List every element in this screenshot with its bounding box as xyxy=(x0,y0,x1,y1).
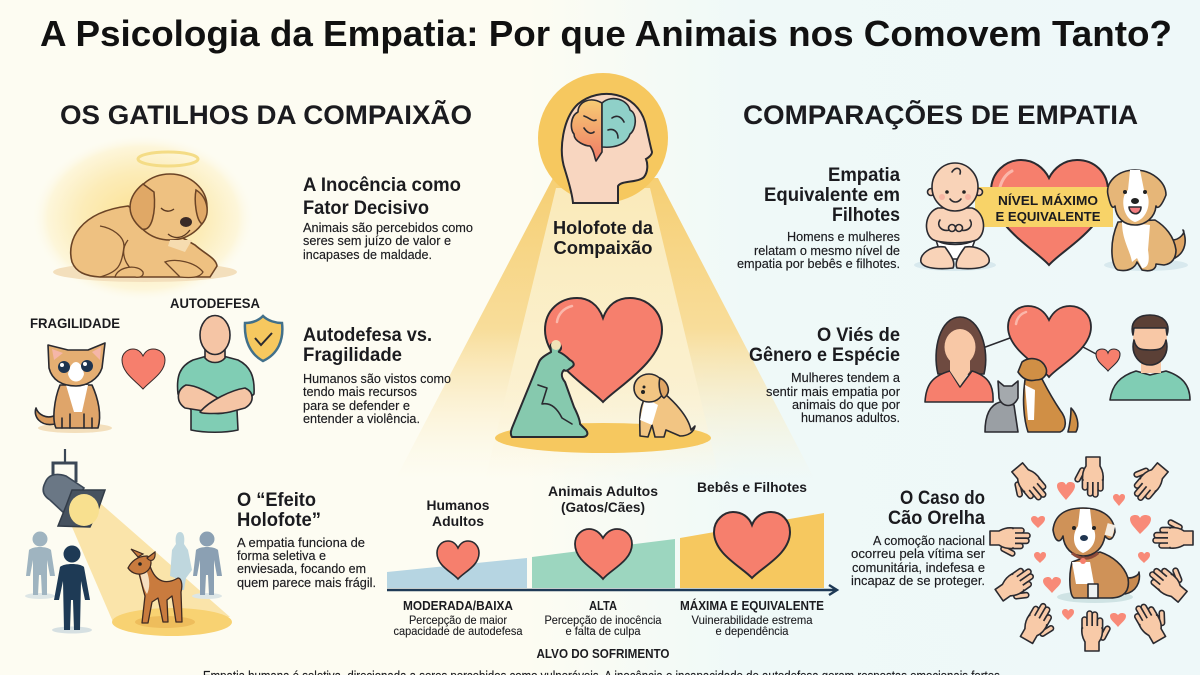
caption: máxima: Vuinerabilidade estrema xyxy=(692,613,813,627)
text: heading xyxy=(749,325,900,366)
text: heading: Filhotes xyxy=(832,205,900,226)
icon: woman xyxy=(925,317,993,402)
panel: Caso do Cão Orelha xyxy=(851,455,1195,651)
caption: máxima: MÁXIMA E EQUIVALENTE xyxy=(680,598,824,613)
icon: spotlight beam and pool xyxy=(72,503,232,636)
caption: máxima: e dependência xyxy=(716,624,789,638)
label: Holofote da Compaixão: Holofote da xyxy=(553,218,654,238)
axis label: ALVO DO SOFRIMENTO xyxy=(536,646,670,661)
heading: left column: OS GATILHOS DA COMPAIXÃO xyxy=(60,99,472,130)
bar: animais adultos xyxy=(532,539,675,588)
text: description xyxy=(303,220,473,262)
caption: moderada: Percepção de maior xyxy=(409,613,507,627)
caption: alta: ALTA xyxy=(589,598,618,613)
text: description: A comoção nacional xyxy=(873,533,985,548)
label: Humanos Adultos xyxy=(426,497,490,529)
text: description: animais do que por xyxy=(792,397,901,412)
text: heading: Equivalente em xyxy=(764,185,900,206)
icon: shield with check xyxy=(245,316,282,361)
text: description: Animais são percebidos como xyxy=(303,220,473,235)
banner: nível máximo xyxy=(975,187,1113,227)
icon: sleeping puppy with halo xyxy=(31,134,255,302)
text: description: seres sem juízo de valor e xyxy=(303,233,451,248)
text: description: incapaz de se proteger. xyxy=(851,573,985,588)
text: description xyxy=(303,371,451,426)
label: Holofote da Compaixão xyxy=(553,218,654,258)
chart: alvo do sofrimento xyxy=(387,479,837,661)
icon: heart xyxy=(1008,306,1091,377)
text: heading: Gênero e Espécie xyxy=(749,345,900,366)
caption: alta xyxy=(544,598,662,638)
text: description: para se defender e xyxy=(303,398,410,413)
icon: man with crossed arms xyxy=(178,316,254,432)
label: Animais Adultos xyxy=(548,483,658,515)
label: Humanos Adultos: Humanos xyxy=(426,497,490,513)
icon: grey cat xyxy=(985,381,1018,432)
text: heading: Empatia xyxy=(828,165,900,186)
text: description: quem parece mais frágil. xyxy=(237,575,376,590)
text: description: relatam o mesmo nível de xyxy=(754,243,900,258)
text: heading: Fator Decisivo xyxy=(303,198,429,219)
panel: Autodefesa vs. Fragilidade xyxy=(30,295,451,433)
brain left lobe xyxy=(571,100,602,161)
label: Animais Adultos: Animais Adultos xyxy=(548,483,658,499)
text: heading: Fragilidade xyxy=(303,345,402,366)
text: description: Homens e mulheres xyxy=(787,229,900,244)
icon: scared kitten xyxy=(35,343,112,433)
bar: bebês e filhotes xyxy=(680,513,824,588)
text: heading xyxy=(888,488,985,529)
icon: head with brain xyxy=(538,73,668,203)
panel: A Inocência xyxy=(31,134,473,302)
text: description: entender a violência. xyxy=(303,411,420,426)
text: description: comunitária, indefesa e xyxy=(852,560,985,575)
text: description: Mulheres tendem a xyxy=(791,370,901,385)
bar: humanos adultos xyxy=(387,558,527,588)
text: heading xyxy=(303,175,461,219)
text: heading: O Viés de xyxy=(817,325,900,346)
brain right lobe xyxy=(602,99,635,147)
icon: green figure xyxy=(511,340,587,437)
icon: grey person left xyxy=(25,532,55,599)
label: Animais Adultos: (Gatos/Cães) xyxy=(561,499,645,515)
text: heading: Holofote” xyxy=(237,510,321,531)
text: description: sentir mais empatia por xyxy=(766,384,901,399)
text: description xyxy=(851,533,986,588)
axis arrow xyxy=(387,585,837,595)
heart: medium xyxy=(575,529,632,579)
caption: moderada xyxy=(394,598,523,638)
icon: happy puppy xyxy=(1104,170,1188,271)
icon: small puppy xyxy=(634,374,695,437)
text: heading xyxy=(237,490,321,531)
text: description xyxy=(737,229,900,271)
text: description: tendo mais recursos xyxy=(303,384,417,399)
icons: floating hearts xyxy=(1031,482,1151,627)
text: description: enviesada, focando em xyxy=(237,561,366,576)
icon: stage lamp xyxy=(43,449,105,527)
icon: big heart xyxy=(991,160,1108,265)
text: heading: Autodefesa vs. xyxy=(303,325,432,346)
text: description: Humanos são vistos como xyxy=(303,371,451,386)
caption: moderada: MODERADA/BAIXA xyxy=(403,598,514,613)
title: A Psicologia da Empatia: Por que Animais nos Comovem Tanto? xyxy=(40,13,1172,54)
icon: big central heart xyxy=(545,298,662,402)
label: Bebês e Filhotes: Bebês e Filhotes xyxy=(697,479,807,495)
icon: small heart xyxy=(122,349,165,389)
text: heading: Cão Orelha xyxy=(888,508,985,529)
text: heading: O “Efeito xyxy=(237,490,316,511)
caption: máxima xyxy=(680,598,824,638)
label: Holofote da Compaixão: Compaixão xyxy=(554,238,652,258)
icon: ground ellipse xyxy=(495,423,711,453)
text: description: A empatia funciona de xyxy=(237,535,365,550)
icon: baby xyxy=(914,163,996,271)
text: description xyxy=(766,370,901,425)
heart: small xyxy=(437,541,479,579)
text: heading: O Caso do xyxy=(900,488,985,509)
label: AUTODEFESA: AUTODEFESA xyxy=(170,295,260,311)
icon: fawn xyxy=(128,549,182,623)
icon: connector lines xyxy=(980,338,1098,355)
heading: right column: COMPARAÇÕES DE EMPATIA xyxy=(743,99,1138,130)
banner: nível máximo: NÍVEL MÁXIMO xyxy=(998,193,1098,208)
panel: Efeito Holofote xyxy=(25,449,376,636)
label: FRAGILIDADE: FRAGILIDADE xyxy=(30,315,120,331)
caption: moderada: capacidade de autodefesa xyxy=(394,624,523,638)
heart: large xyxy=(714,512,790,578)
text: description: empatia por bebês e filhotes. xyxy=(737,256,900,271)
text: description: humanos adultos. xyxy=(801,410,900,425)
panel: Viés de Gênero xyxy=(749,306,1190,432)
icon: small heart xyxy=(1096,349,1120,371)
icon: injured dog xyxy=(1053,508,1139,603)
panel: Empatia Equivalente xyxy=(737,160,1188,271)
label: Humanos Adultos: Adultos xyxy=(432,513,484,529)
text: heading: A Inocência como xyxy=(303,175,461,196)
text: description: incapases de maldade. xyxy=(303,247,432,262)
text: description: ocorreu pela vítima ser xyxy=(851,546,986,561)
icon: pale people right xyxy=(170,532,222,599)
central spotlight beams xyxy=(395,178,815,480)
caption: alta: e falta de culpa xyxy=(566,624,641,638)
text: description: forma seletiva e xyxy=(237,548,326,563)
text: heading xyxy=(303,325,432,366)
text: heading xyxy=(764,165,900,226)
icon: bearded man xyxy=(1110,315,1190,400)
banner: nível máximo: E EQUIVALENTE xyxy=(996,209,1101,224)
text: description xyxy=(237,535,376,590)
icons: ring of hands xyxy=(990,455,1195,651)
icon: brown dog xyxy=(1018,359,1078,432)
icon: dark person xyxy=(52,546,92,634)
caption: alta: Percepção de inocência xyxy=(544,613,662,627)
